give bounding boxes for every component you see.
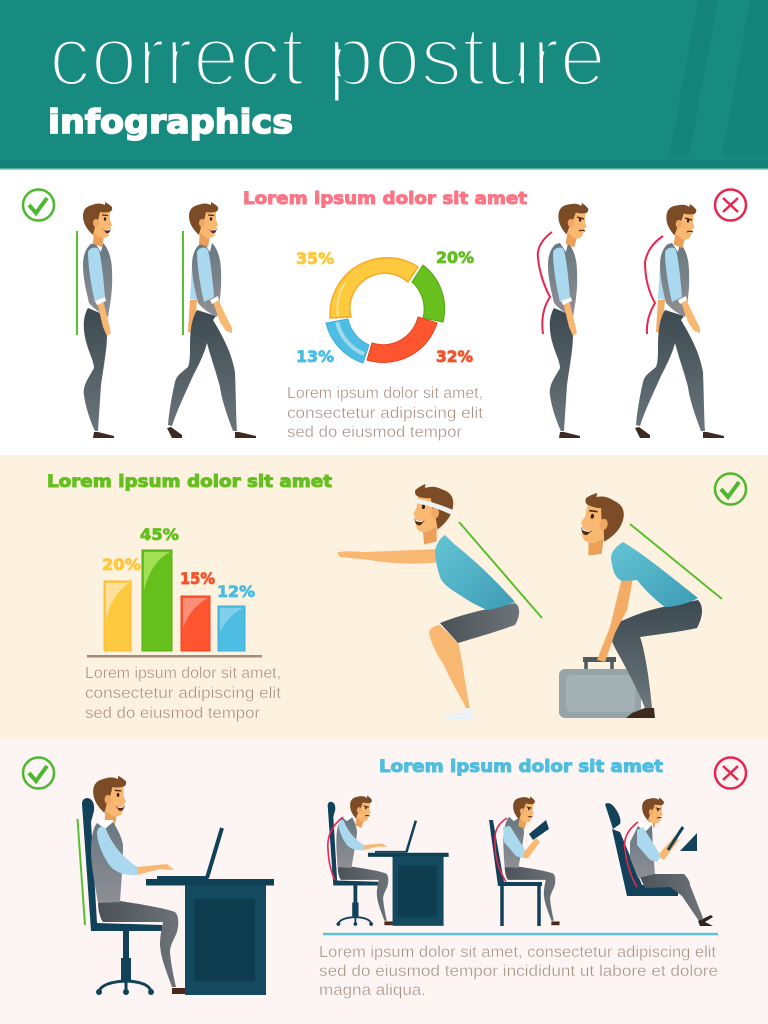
panel: squat and lifting [0,455,768,740]
icon: green check [715,474,746,504]
text block: Lorem ipsum dolor sit amet, consectetur adipiscing elit [319,944,717,961]
icon: green check [23,758,54,788]
text block: sed do eiusmod tempor [85,705,261,722]
donut chart: 32% [436,347,473,366]
heading: Lorem ipsum dolor sit amet [379,757,663,777]
donut chart: 35% [296,249,334,268]
figure: correct sitting at desk [78,776,274,995]
figure: lifting a case [559,491,722,718]
figure: slouching at desk [328,794,449,926]
text block: sed do eiusmod tempor [287,424,463,441]
text block [287,385,484,441]
figure: squat [337,483,542,719]
icon: green check [23,190,54,220]
heading: Lorem ipsum dolor sit amet [47,472,332,492]
panel: sitting posture [0,740,768,1024]
bar chart: 12% [217,582,255,601]
figure: slouching while driving [605,796,713,926]
donut chart: 13% [296,347,334,366]
subtitle: infographics [48,102,293,141]
figure: slouched standing [538,201,589,438]
donut chart [296,248,474,366]
text block: sed do eiusmod tempor incididunt ut labore et dolore [319,963,718,980]
title: correct posture [49,9,606,103]
bar chart: 15% [180,569,215,588]
donut chart: 20% [436,248,474,267]
bar chart: 45% [140,525,179,544]
header banner [0,0,768,170]
text block: magna aliqua. [319,982,426,999]
icon: red cross [715,758,746,788]
figure: slouched walking [635,202,724,438]
text block: consectetur adipiscing elit [85,685,282,702]
figure: correct standing [76,202,114,438]
text block: consectetur adipiscing elit [287,405,484,422]
text block [319,944,718,999]
bar chart [87,525,262,658]
text block: Lorem ipsum dolor sit amet, [85,665,281,682]
figure: correct walking [167,202,256,438]
text block: Lorem ipsum dolor sit amet, [287,385,483,402]
bar chart: 20% [102,555,141,574]
figure: slouching while reading [489,795,560,926]
panel: standing and walking posture [0,170,768,455]
text block [85,665,282,722]
icon: red cross [715,190,746,220]
heading: Lorem ipsum dolor sit amet [243,189,527,209]
